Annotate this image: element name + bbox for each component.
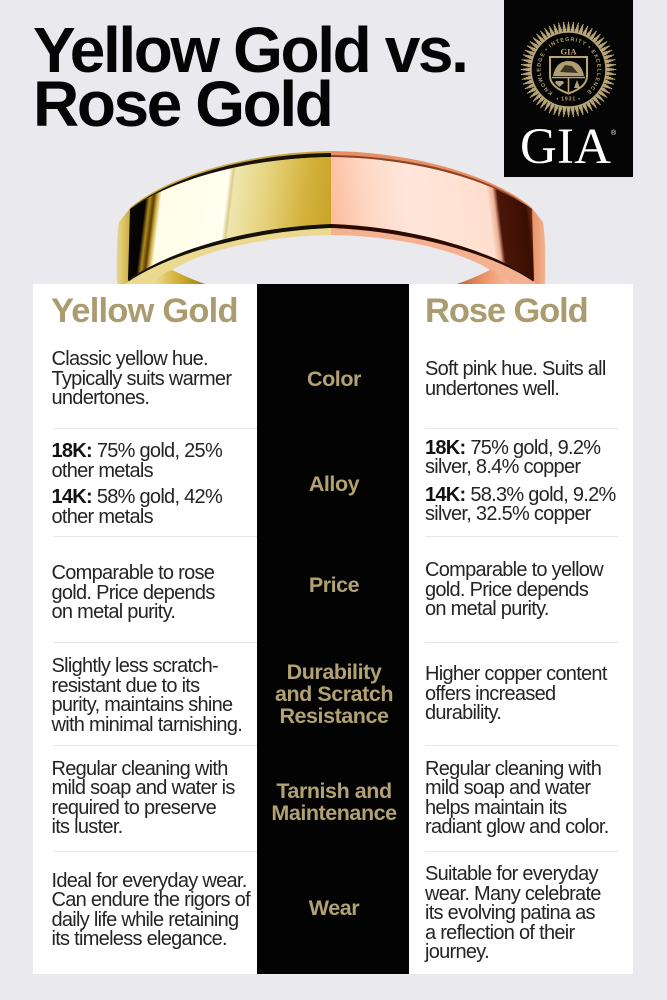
text: rose alloy 18k: silver, 8.4% copper [425, 456, 580, 478]
ring: yellow half [117, 151, 331, 284]
text: rose color: Soft pink hue. Suits all [425, 358, 606, 380]
label: durability: Durability [287, 660, 381, 684]
text: yellow color [52, 348, 232, 409]
label: durability: and Scratch [275, 682, 393, 706]
text: yellow tarnish: mild soap and water is [52, 777, 235, 799]
text: rose tarnish: helps maintain its [425, 797, 567, 819]
text: yellow color: undertones. [52, 387, 149, 409]
label: durability: Resistance [279, 704, 389, 728]
label: tarnish: Maintenance [271, 801, 397, 825]
comparison table [33, 284, 633, 974]
text: yellow durability: Slightly less scratch- [52, 655, 218, 677]
text: yellow wear: Ideal for everyday wear. [52, 870, 247, 892]
text: rose price [425, 559, 604, 620]
icon: GIA seal [520, 22, 616, 118]
text: rose alloy 18k [425, 436, 600, 478]
text: rose price: gold. Price depends [425, 579, 588, 601]
text: yellow durability: resistant due to its [52, 675, 199, 697]
text: rose price: Comparable to yellow [425, 559, 603, 581]
text: yellow price: gold. Price depends [52, 582, 215, 604]
label: tarnish [271, 779, 397, 825]
text: rose alloy 14k [425, 484, 616, 525]
text: yellow alloy 18k: other metals [52, 460, 153, 482]
text: rose wear: wear. Many celebrate [425, 883, 601, 905]
text: rose wear: its evolving patina as [425, 902, 595, 924]
text: yellow price: on metal purity. [52, 601, 175, 623]
text: yellow alloy 14k [52, 486, 222, 528]
text: yellow color: Typically suits warmer [52, 368, 231, 390]
text: rose wear [424, 863, 601, 963]
label: color: Color [307, 367, 361, 391]
text: rose durability [425, 663, 608, 724]
icon: GIA seal: KNOWLEDGE • INTEGRITY • EXCELLENCE [536, 37, 602, 96]
text: rose wear: journey. [425, 941, 489, 963]
text: yellow wear: Can endure the rigors of [52, 889, 250, 911]
illustration: two-tone ring [116, 151, 546, 284]
text: rose alloy 18k: 18K: 75% gold, 9.2% [425, 436, 600, 458]
label: alloy: Alloy [309, 472, 359, 496]
text: yellow alloy 18k [52, 440, 222, 482]
heading: rose gold: Rose Gold [425, 292, 588, 330]
text: yellow color: Classic yellow hue. [52, 348, 208, 370]
text: rose color [425, 358, 606, 400]
text: yellow tarnish [52, 758, 235, 838]
text: rose alloy 14k: 14K: 58.3% gold, 9.2% [425, 484, 616, 506]
text: rose tarnish: Regular cleaning with [425, 758, 601, 780]
text: yellow price: Comparable to rose [52, 562, 214, 584]
text: rose tarnish: mild soap and water [425, 777, 590, 799]
text: rose durability: durability. [425, 702, 501, 724]
text: yellow wear: daily life while retaining [52, 909, 238, 931]
text: rose alloy 14k: silver, 32.5% copper [425, 503, 591, 525]
label: price: Price [309, 573, 359, 597]
text: yellow alloy 14k: 14K: 58% gold, 42% [52, 486, 222, 508]
label: wear: Wear [309, 896, 359, 920]
text: rose price: on metal purity. [425, 598, 549, 620]
text: rose wear: a reflection of their [425, 922, 574, 944]
title [33, 14, 466, 140]
text: yellow alloy 18k: 18K: 75% gold, 25% [52, 440, 222, 462]
ring: rose half [331, 151, 545, 284]
text: rose durability: Higher copper content [425, 663, 607, 685]
text: yellow durability [52, 655, 242, 736]
label: durability [275, 660, 393, 728]
text: yellow tarnish: Regular cleaning with [52, 758, 228, 780]
icon: GIA seal: GIA [560, 46, 577, 56]
center column [257, 284, 409, 974]
text: yellow durability: with minimal tarnishing. [52, 714, 242, 736]
text: yellow alloy 14k: other metals [52, 506, 153, 528]
text: rose tarnish [425, 758, 609, 838]
text: yellow durability: purity, maintains shine [52, 694, 232, 716]
text: rose wear: Suitable for everyday [425, 863, 598, 885]
text: yellow wear [52, 870, 251, 950]
logo: GIA [504, 0, 633, 177]
logo wordmark: GIA [520, 119, 611, 175]
heading: yellow gold: Yellow Gold [51, 292, 238, 330]
text: yellow tarnish: required to preserve [52, 797, 216, 819]
text: yellow price [52, 562, 215, 623]
text: rose color: undertones well. [425, 378, 559, 400]
text: rose durability: offers increased [425, 683, 555, 705]
text: yellow wear: its timeless elegance. [52, 928, 227, 950]
label: tarnish: Tarnish and [276, 779, 392, 803]
icon: GIA seal: • 1931 • [556, 96, 581, 102]
text: yellow tarnish: its luster. [52, 816, 122, 838]
logo: GIA: ® [611, 129, 617, 137]
title: Yellow Gold vs. [33, 14, 466, 86]
text: rose tarnish: radiant glow and color. [425, 816, 609, 838]
title: Rose Gold [33, 68, 331, 140]
